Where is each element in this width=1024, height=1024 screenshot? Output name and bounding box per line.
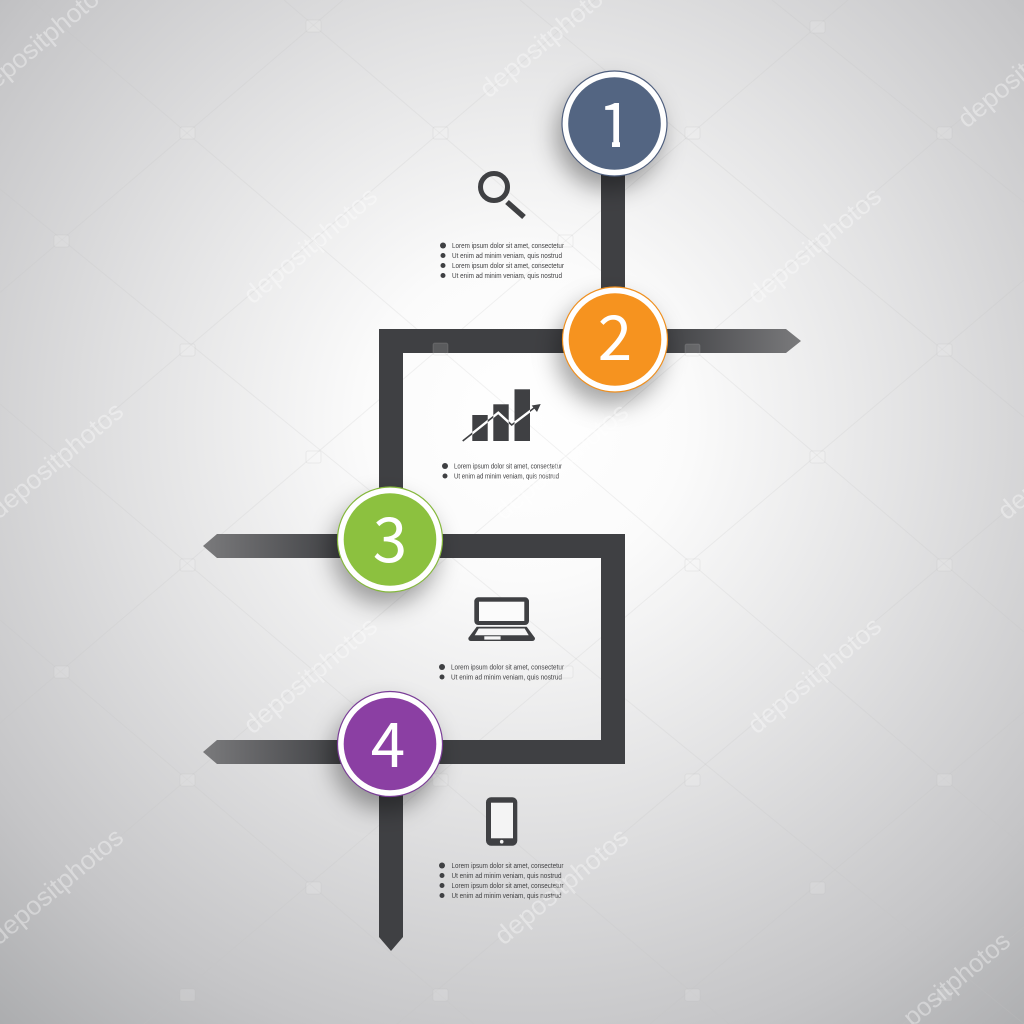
segment: arrow pointing left from 3 bbox=[203, 534, 345, 558]
segment: arrow pointing right bbox=[660, 329, 801, 353]
watermark text: depositphotos bbox=[488, 397, 634, 526]
step 1 badge bbox=[556, 71, 667, 189]
watermark text: depositphotos bbox=[741, 611, 887, 740]
text block: step 3: Ut enim ad minim veniam, quis nostrud bbox=[451, 674, 562, 682]
timeline connector bbox=[203, 170, 801, 951]
text block: step 2: Ut enim ad minim veniam, quis nostrud bbox=[454, 474, 559, 480]
text block: step 4: Ut enim ad minim veniam, quis nostrud bbox=[452, 893, 562, 900]
icon: smartphone bbox=[486, 797, 517, 846]
text block: step 4: Lorem ipsum dolor sit amet, consectetur bbox=[452, 863, 564, 870]
text block: step 4: Ut enim ad minim veniam, quis nostrud bbox=[452, 873, 562, 880]
text block: step 1 bbox=[440, 242, 565, 280]
watermark text: depositphotos bbox=[237, 611, 383, 740]
text block: step 3 bbox=[439, 664, 565, 682]
text block: step 3: Lorem ipsum dolor sit amet, consectetur bbox=[451, 664, 565, 672]
text block: step 1: Lorem ipsum dolor sit amet, consectetur bbox=[452, 263, 565, 270]
step 4 badge bbox=[332, 692, 442, 810]
text block: step 1: Ut enim ad minim veniam, quis nostrud bbox=[452, 253, 562, 260]
step 4 badge: 4 bbox=[371, 695, 405, 785]
step 3 badge: 3 bbox=[373, 490, 407, 580]
watermark text: depositphotos bbox=[488, 822, 634, 951]
segment: line 1 to 2 bbox=[601, 170, 625, 295]
step 1 badge: 1 bbox=[598, 75, 632, 165]
text block: step 4: Lorem ipsum dolor sit amet, consectetur bbox=[452, 883, 564, 890]
segment: arrow pointing down bbox=[379, 790, 403, 951]
text block: step 2 bbox=[442, 463, 563, 480]
segment: line 3 to 4 bbox=[435, 534, 625, 764]
step 3 badge bbox=[332, 487, 442, 605]
text block: step 1: Lorem ipsum dolor sit amet, consectetur bbox=[452, 243, 565, 250]
text block: step 2: Lorem ipsum dolor sit amet, consectetur bbox=[454, 464, 563, 470]
watermark text: depositphotos bbox=[741, 181, 887, 310]
text block: step 1: Ut enim ad minim veniam, quis nostrud bbox=[452, 273, 562, 280]
icon: bar chart with rising arrow bbox=[463, 389, 541, 441]
icon: magnifying glass bbox=[480, 174, 524, 217]
segment: line 2 to 3 bbox=[379, 329, 570, 495]
text block: step 4 bbox=[439, 862, 564, 900]
segment: arrow pointing left from 4 bbox=[203, 740, 345, 764]
step 2 badge bbox=[557, 287, 668, 405]
step 2 badge: 2 bbox=[598, 288, 632, 378]
watermark text: depositphotos bbox=[237, 181, 383, 310]
icon: laptop bbox=[468, 597, 535, 641]
